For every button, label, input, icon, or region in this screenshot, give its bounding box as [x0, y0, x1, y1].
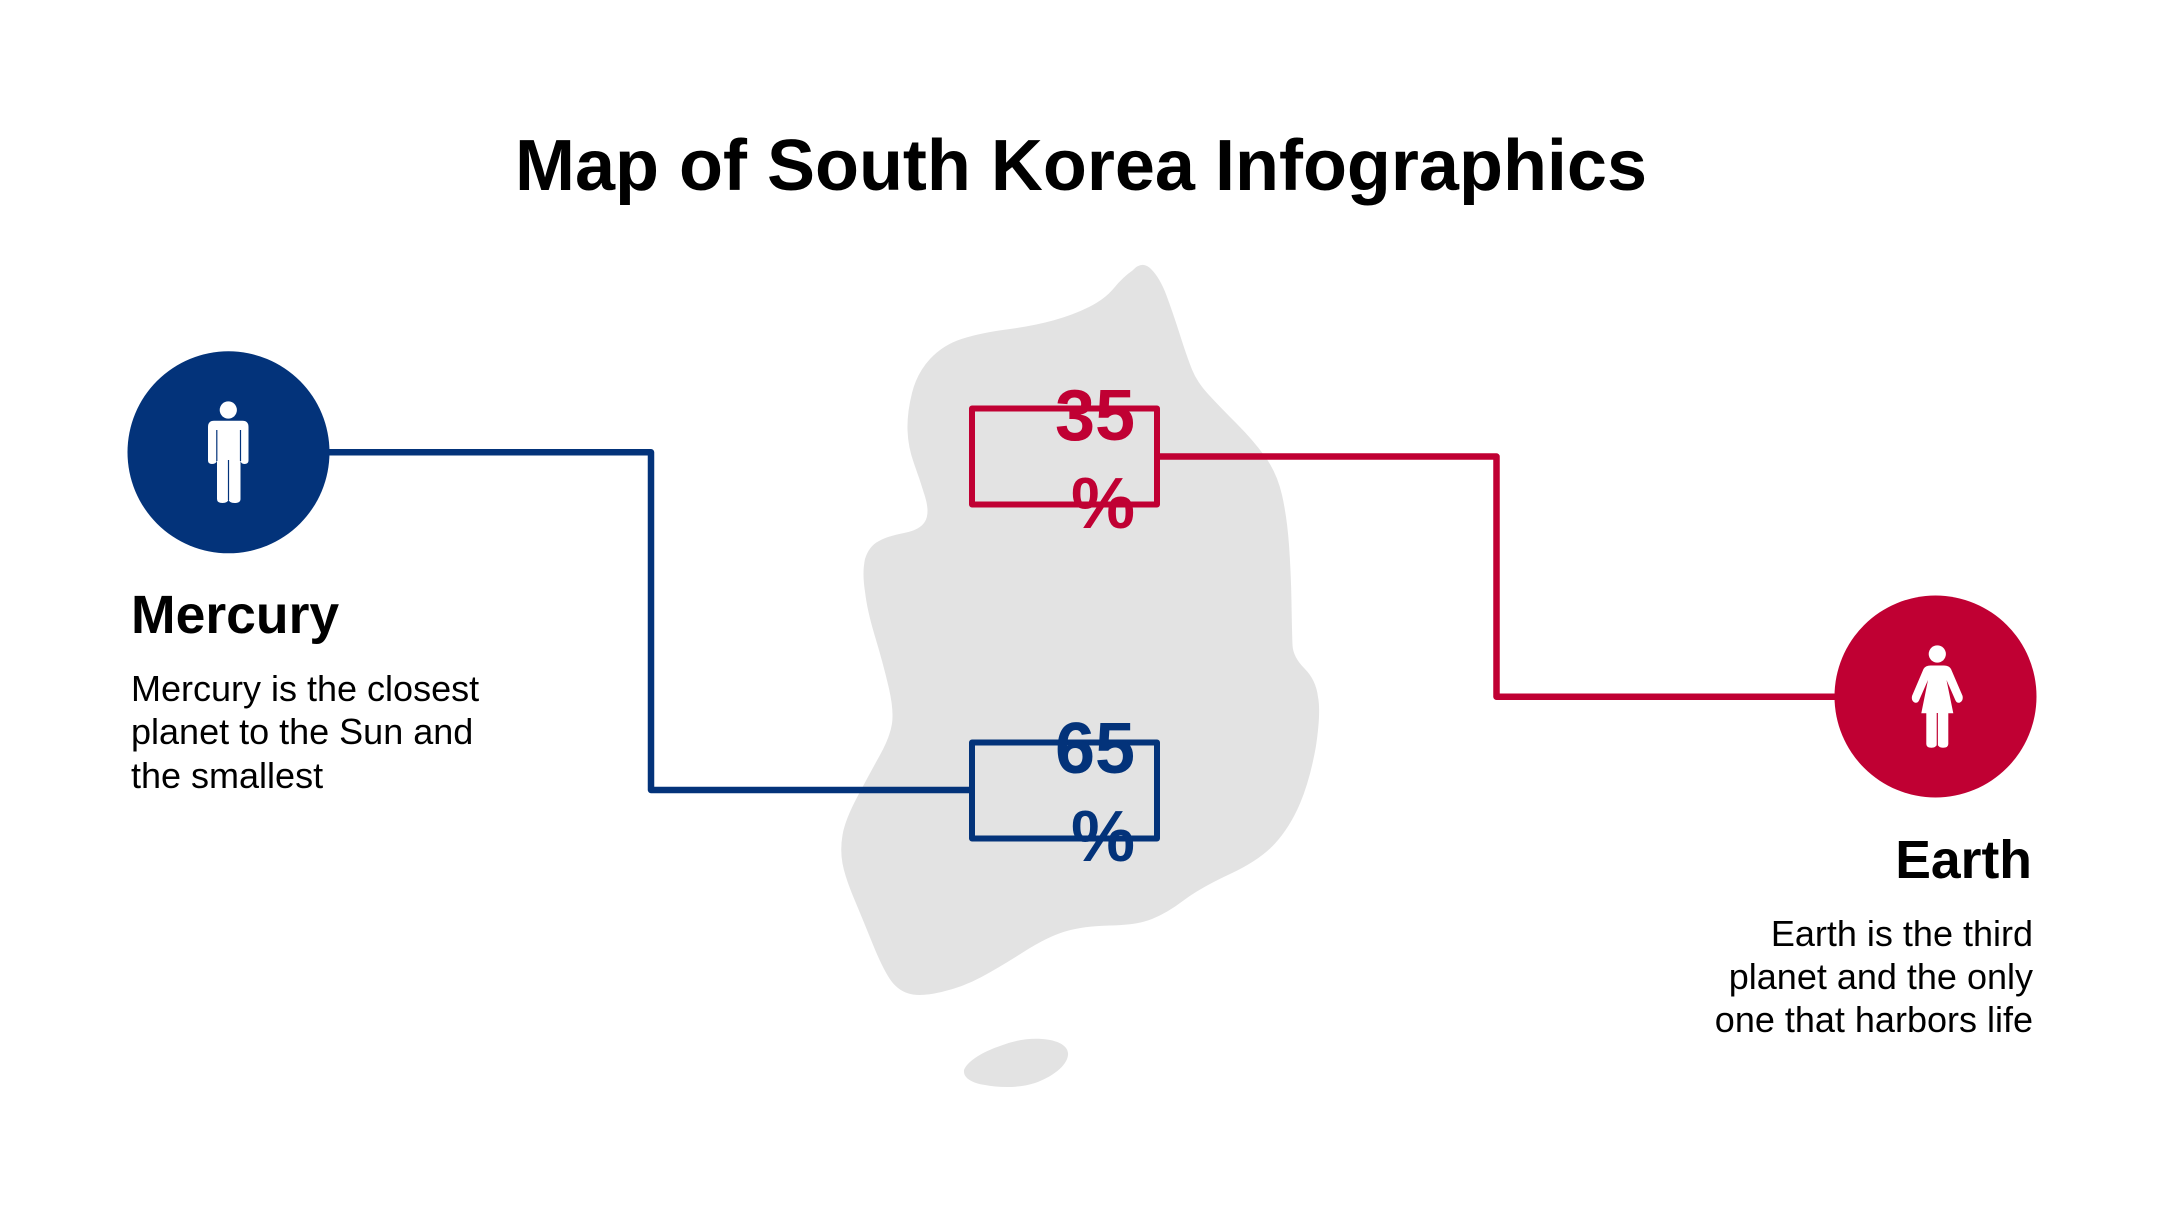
percent sign: %: [1071, 464, 1135, 544]
description: Earth is the third: [1771, 913, 2033, 954]
value 35: 35: [1055, 376, 1135, 456]
panel: Earth: [1715, 596, 2036, 1040]
description: [1715, 913, 2033, 1040]
connector: Mercury to 65%: [326, 452, 975, 790]
value 65: 65: [1055, 709, 1135, 789]
description: Mercury is the closest: [131, 668, 479, 709]
mainland: [841, 265, 1319, 995]
description: one that harbors life: [1715, 999, 2033, 1040]
callout: 35%: [972, 376, 1157, 544]
description: planet to the Sun and: [131, 711, 473, 752]
callout: 65%: [972, 709, 1157, 877]
description: [131, 668, 479, 796]
description: the smallest: [131, 755, 323, 796]
percent sign: %: [1071, 797, 1135, 877]
icon: female figure in red circle: [1834, 596, 2036, 798]
heading: Mercury: [131, 586, 339, 645]
panel: Mercury: [128, 351, 479, 796]
connector: 35% to Earth: [1157, 456, 1838, 697]
heading: Earth: [1895, 831, 2032, 890]
description: planet and the only: [1729, 956, 2033, 997]
icon: male figure in blue circle: [128, 351, 330, 553]
title: Map of South Korea Infographics: [515, 126, 1647, 206]
island: [964, 1039, 1068, 1087]
map of South Korea: [841, 265, 1319, 1087]
